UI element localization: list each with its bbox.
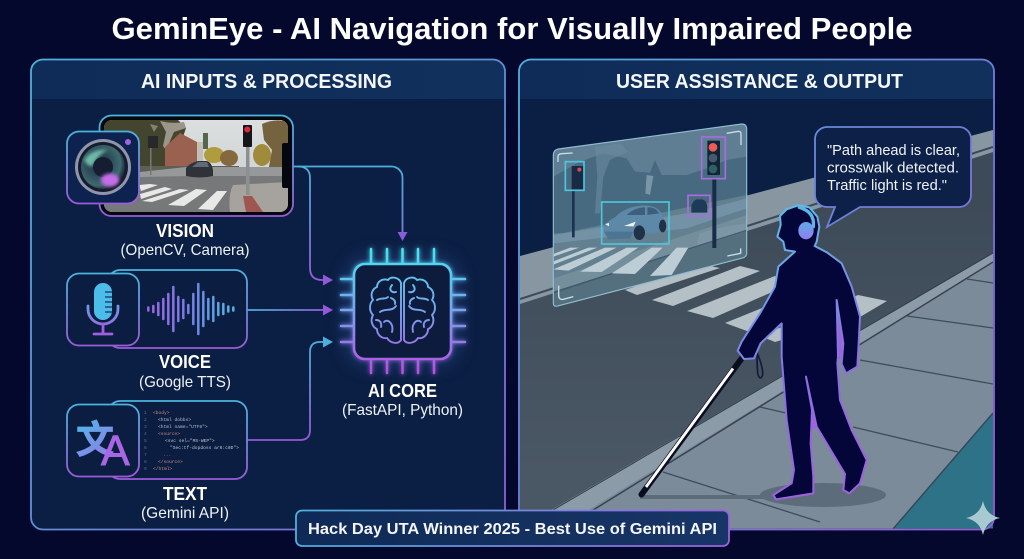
- code listing: 4: [144, 431, 147, 437]
- code listing: [144, 410, 239, 472]
- small detected vehicle: [691, 199, 707, 213]
- far sidewalk: [520, 130, 993, 305]
- code listing: 2: [144, 417, 147, 423]
- near crosswalk: [625, 264, 887, 342]
- viewfinder corners: [558, 131, 741, 299]
- code listing: 6: [144, 445, 147, 451]
- label: voice: [139, 352, 231, 391]
- code listing: "Sec:tf-dopdoss ar6:c0D">: [170, 445, 239, 451]
- label: text: [141, 484, 229, 522]
- icon: AI core chip with brain: [341, 249, 465, 373]
- code listing: 9: [144, 466, 147, 472]
- label: voice: (Google TTS): [139, 374, 231, 391]
- title: GeminEye - AI Navigation for Visually Impaired People: [112, 11, 912, 46]
- stripes: [553, 248, 688, 276]
- brain: [370, 278, 435, 343]
- code listing: <html name="UTF8">: [158, 424, 208, 430]
- code listing: 5: [144, 438, 147, 444]
- heading: AI inputs: AI INPUTS & PROCESSING: [141, 70, 392, 93]
- code listing: <html dobbs>: [158, 417, 191, 423]
- waveform: [148, 284, 233, 334]
- detection boxes: [565, 137, 725, 244]
- panel: AI inputs and processing: [31, 60, 505, 530]
- icon: translate tile: A: [101, 427, 130, 475]
- rim light: [812, 316, 842, 430]
- code listing: 8: [144, 459, 147, 465]
- label: vision: (OpenCV, Camera): [120, 242, 250, 259]
- voice: waveform box: [108, 270, 247, 348]
- speech bubble: crosswalk detected.: [827, 160, 959, 176]
- code listing: </source>: [158, 459, 183, 465]
- arrow: text to core: [247, 336, 333, 440]
- speech bubble: [815, 127, 971, 227]
- vision: phone with street photo: [100, 116, 293, 216]
- person silhouette with headphones: [738, 205, 867, 499]
- code listing: 1: [144, 410, 147, 416]
- near sidewalk: [552, 263, 993, 528]
- code listing: 3: [144, 424, 147, 430]
- code listing: </html>: [153, 466, 173, 472]
- label: AI core: (FastAPI, Python): [342, 402, 463, 419]
- left traffic light: [572, 190, 575, 237]
- label: text: TEXT: [163, 484, 207, 504]
- detected car: [604, 205, 666, 240]
- white cane: [642, 358, 742, 494]
- headphones: [799, 207, 813, 227]
- code listing: <source>: [158, 431, 180, 437]
- icon: microphone tile: [67, 274, 139, 346]
- badge: hack day winner: [296, 510, 729, 546]
- crosswalk: [139, 184, 227, 210]
- ground shadow: [640, 495, 770, 499]
- traffic light: [246, 146, 250, 195]
- label: AI core: [342, 381, 463, 419]
- kerb in overlay: [553, 215, 747, 293]
- car: [186, 161, 213, 178]
- speech bubble: Traffic light is red.": [827, 178, 947, 194]
- arrow: vision to core left: [298, 166, 333, 286]
- arrow: vision to core top: [293, 166, 408, 241]
- badge: hack day winner: Hack Day UTA Winner 2025 - Best Use of Gemini API: [308, 521, 717, 538]
- icon: camera lens tile: [67, 132, 139, 204]
- street scene: [520, 99, 994, 530]
- label: vision: VISION: [156, 221, 214, 241]
- right traffic light: [712, 179, 716, 248]
- icon: sparkle: [966, 501, 1000, 535]
- street photo: [104, 120, 288, 212]
- icon: translate tile: 文: [76, 409, 114, 464]
- speech bubble: "Path ahead is clear,: [827, 143, 960, 159]
- label: voice: VOICE: [159, 352, 211, 372]
- pavement: [229, 182, 288, 212]
- teal grass: [893, 413, 993, 529]
- icon: translate tile: [67, 404, 139, 476]
- code listing: <svc sel="MS-WEP">: [165, 438, 215, 444]
- tree line: [553, 153, 747, 233]
- arrow: voice to core: [247, 304, 333, 316]
- heading: user assistance: USER ASSISTANCE & OUTPUT: [616, 70, 903, 93]
- label: AI core: AI CORE: [368, 381, 437, 401]
- code listing: ...: [163, 453, 171, 458]
- sidewalk joints: [663, 279, 993, 522]
- panel: user assistance and output: [519, 60, 994, 530]
- road in overlay: [564, 195, 746, 233]
- body: [738, 205, 867, 499]
- label: text: (Gemini API): [141, 505, 229, 522]
- text: code box: [108, 401, 247, 479]
- road: [520, 152, 993, 529]
- AR detection overlay: [550, 120, 750, 310]
- label: vision: [120, 221, 250, 259]
- code listing: 7: [144, 452, 147, 458]
- cane strap: [756, 352, 764, 379]
- code listing: <body>: [153, 410, 170, 416]
